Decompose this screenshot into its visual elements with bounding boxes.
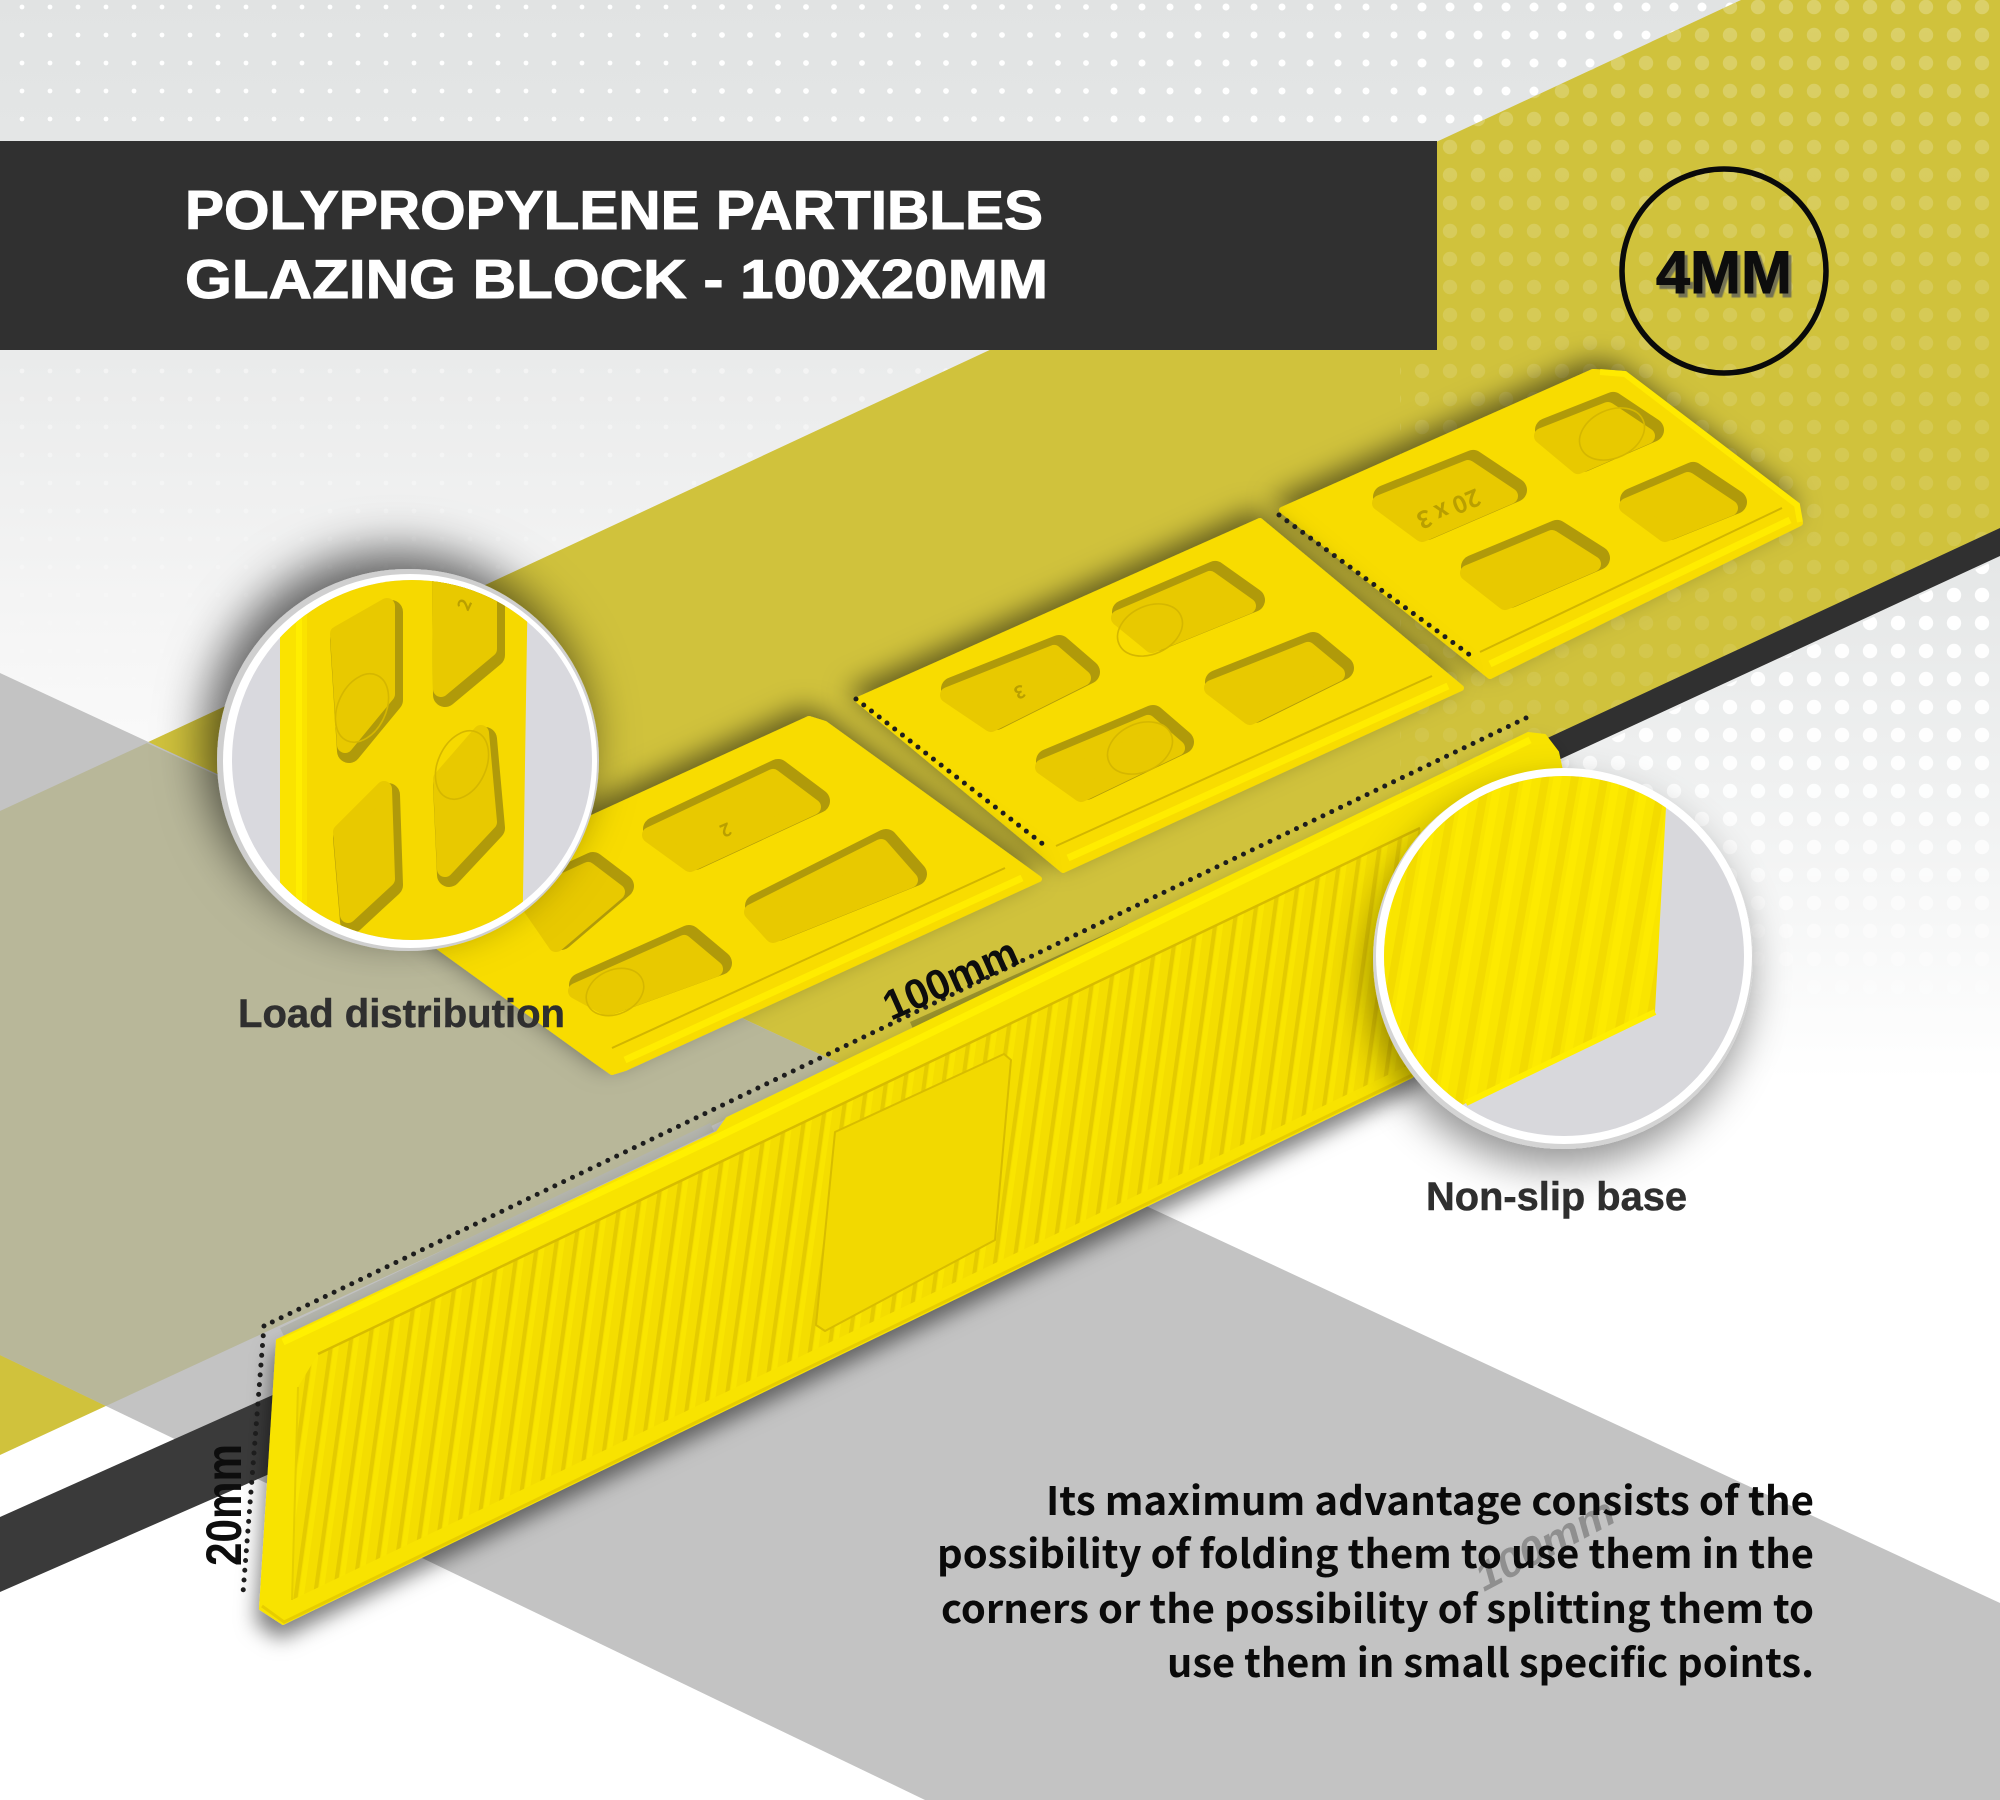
flat label area: [816, 1054, 1011, 1331]
recess: [1109, 573, 1253, 666]
background dot pattern: yellow band: [1400, 0, 2000, 800]
grey diagonal band: [0, 673, 2000, 1800]
recess: 2: [450, 594, 478, 615]
description text: Its maximum advantage consists of the: [1046, 1471, 1814, 1527]
title: GLAZING BLOCK - 100X20MM: [185, 248, 1048, 310]
background dot pattern: lower right: [1562, 564, 1990, 854]
description text: corners or the possibility of splitting them to: [941, 1579, 1814, 1635]
thickness badge: 4MM: [1622, 169, 1826, 373]
recess: [576, 937, 720, 1025]
label: 20mm: 20mm: [196, 1444, 252, 1566]
recess: [1212, 644, 1342, 717]
description text: use them in small specific points.: [1167, 1633, 1814, 1689]
recess: [1627, 474, 1735, 534]
title: POLYPROPYLENE PARTIBLES: [185, 179, 1043, 241]
dark diagonal strip left: [0, 1394, 290, 1592]
recess: [341, 789, 391, 921]
recess: [1043, 712, 1182, 794]
recess: [440, 569, 493, 695]
olive overlap area: [0, 743, 843, 1406]
recess with 20 x 3 marking: 20 x 3: [1412, 482, 1487, 540]
dark diagonal strip right: [1000, 528, 2000, 1018]
recess: [752, 841, 915, 935]
dotted cut line: right: [1279, 515, 1474, 658]
title banner: [0, 141, 1437, 350]
ghost label: 100mm: 100mm: [1468, 1490, 1622, 1600]
block piece: right section: [1282, 372, 1800, 676]
description text: possibility of folding them to use them in the: [937, 1524, 1814, 1580]
block piece: middle section: [858, 521, 1461, 870]
label: non-slip base: Non-slip base: [1426, 1175, 1687, 1219]
recess: [1542, 398, 1653, 470]
background dot pattern: top grey area: [20, 2, 1733, 374]
dotted line: 20mm width: [243, 1326, 264, 1593]
shadow above wedge: [910, 924, 1132, 1036]
magnifier: non-slip base: [1370, 768, 1753, 1160]
thickness badge: 4MM: 4MM: [1656, 239, 1792, 306]
ribbed surface: [292, 828, 1440, 1600]
recess with marking: [650, 771, 818, 864]
block piece: left section: [429, 719, 1039, 1072]
wedge block: ribbed underside: [260, 733, 1590, 1624]
dotted cut line: left: [856, 699, 1048, 848]
recess with marking: 2: [716, 816, 736, 845]
recess with 3 marking: [948, 647, 1088, 724]
title: [185, 179, 1048, 310]
recess: [525, 864, 622, 944]
recess with 20 x 3 marking: [1380, 462, 1515, 540]
recess with 3 marking: 3: [1010, 678, 1030, 707]
dotted line: 100mm length: [264, 718, 1526, 1326]
label: load distribution: Load distribution: [238, 992, 565, 1036]
recess: [325, 606, 399, 751]
recess: [425, 722, 499, 875]
recess: [1468, 532, 1598, 602]
description text: [937, 1471, 1814, 1689]
magnifier: load distribution: [217, 569, 599, 960]
grey sliver above wedge: [282, 1127, 712, 1332]
label: 100mm: 100mm: [876, 928, 1025, 1029]
